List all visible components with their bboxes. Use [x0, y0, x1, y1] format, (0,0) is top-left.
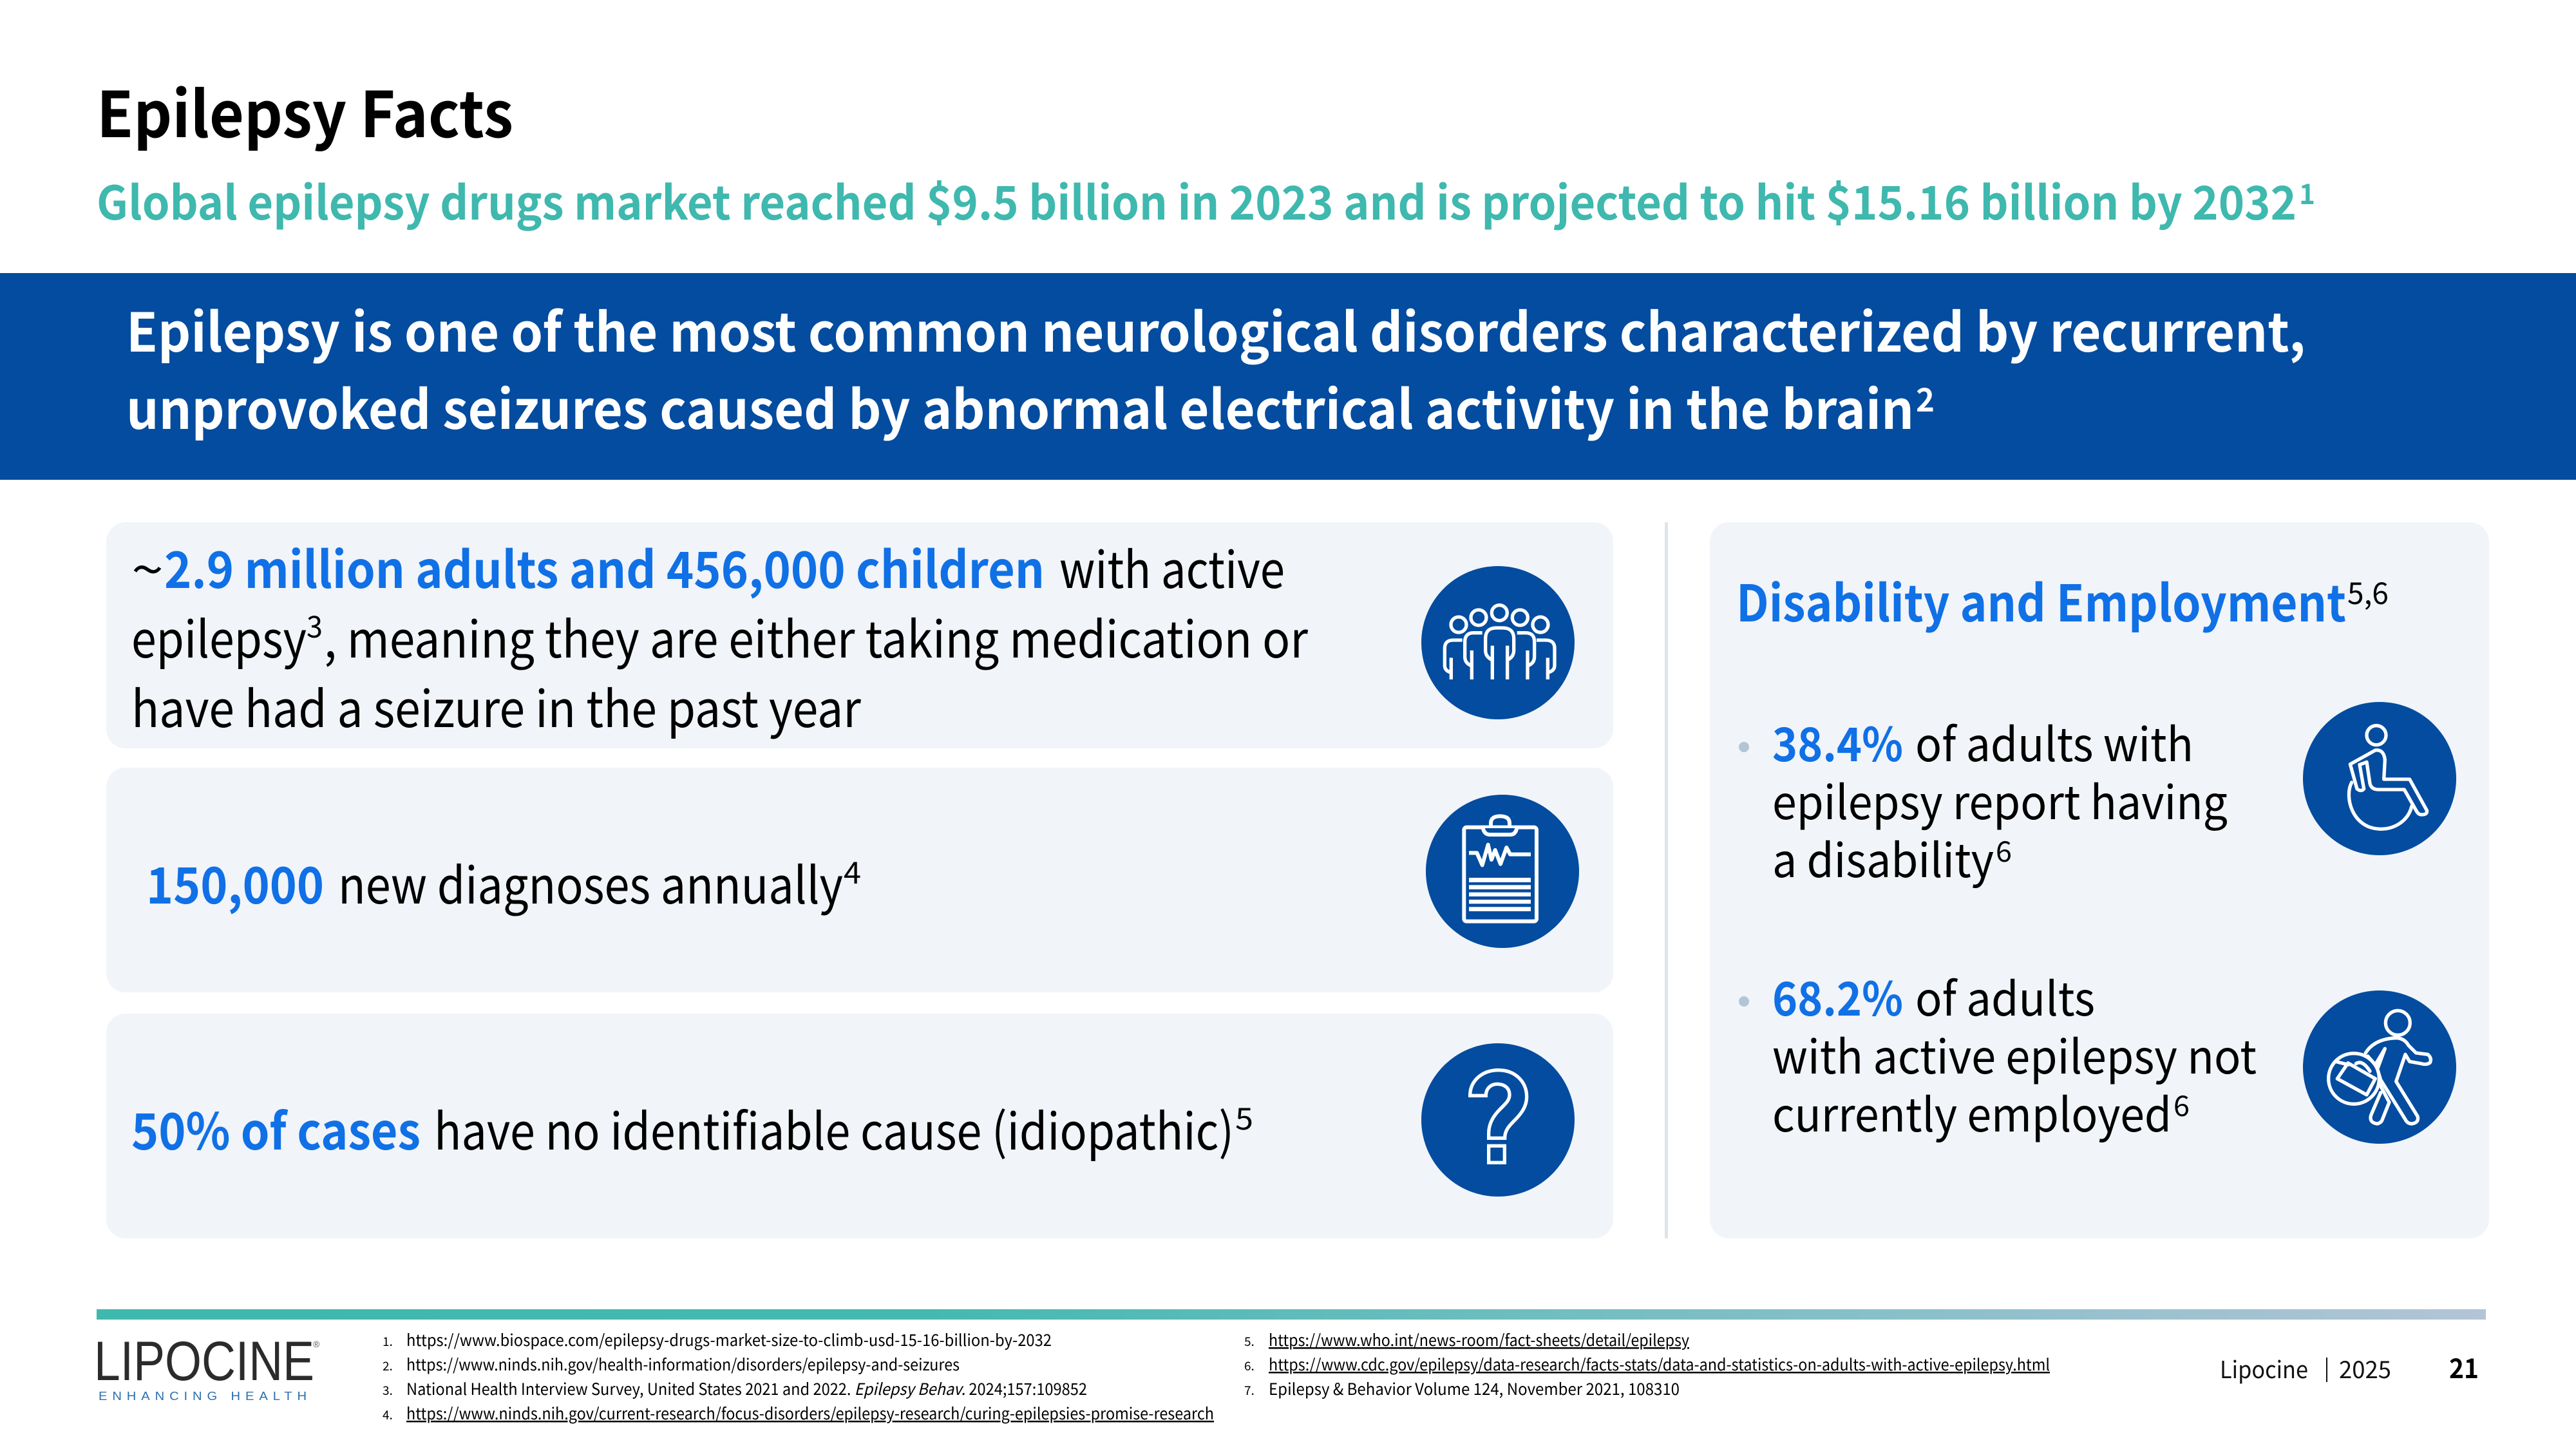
footer label: Lipocine 2025: 2025	[2339, 1350, 2391, 1385]
icon: question mark	[1421, 1043, 1575, 1197]
heading: disability and employment: Disability and Employment	[1736, 564, 2346, 636]
subtitle: market size: Global epilepsy drugs market reached $9.5 billion in 2023 and is projected to hit $15.16 billion by 2032	[97, 166, 2297, 233]
title: Epilepsy Facts	[97, 64, 513, 156]
bullet: disability statistic: epilepsy report having	[1772, 765, 2228, 833]
bullet: employment statistic: 6	[2174, 1083, 2190, 1124]
text block: prevalence: epilepsy	[131, 600, 307, 672]
footnotes: references 1 to 4: https://www.ninds.nih.gov/health-information/disorders/epilepsy-and-seizures	[406, 1352, 960, 1376]
text block: prevalence: ~	[131, 531, 164, 603]
footnotes: references 5 to 7: Epilepsy & Behavior Volume 124, November 2021, 108310	[1269, 1377, 1680, 1400]
banner: definition of epilepsy: 2	[1916, 375, 1935, 421]
footnotes: references 1 to 4: 1.	[383, 1332, 393, 1350]
icon: group of people	[1421, 566, 1575, 719]
icon: clipboard with ECG trace	[1426, 795, 1579, 948]
icon: person in wheelchair	[2303, 702, 2456, 855]
footnotes: references 1 to 4: https://www.ninds.nih.gov/current-research/focus-disorders/epilepsy-research/curing-epilepsies-promise-research	[406, 1401, 1214, 1425]
text block: new diagnoses	[146, 846, 861, 918]
footnotes: references 5 to 7: https://www.who.int/news-room/fact-sheets/detail/epilepsy	[1269, 1328, 1689, 1351]
page number: 21	[2449, 1347, 2479, 1387]
subtitle: market size: 1	[2299, 171, 2315, 213]
footnotes: references 1 to 4: National Health Interview Survey, United States 2021 and 2022. Epilepsy Behav. 2024;157:109852	[406, 1377, 1087, 1400]
bullet: employment statistic: with active epilepsy not	[1772, 1019, 2257, 1087]
logo: Lipocine: ENHANCING HEALTH	[99, 1390, 312, 1403]
footer label: Lipocine 2025: Lipocine	[2220, 1350, 2308, 1385]
panel: disability and employment	[1710, 522, 2489, 1238]
bullet: disability statistic: 38.4%	[1772, 707, 1903, 775]
bullet: employment statistic: of adults	[1915, 961, 2095, 1029]
text block: prevalence	[131, 531, 1309, 742]
text block: idiopathic cases: 50% of cases	[131, 1092, 421, 1164]
icon: person walking away with briefcase	[2303, 990, 2456, 1144]
text block: prevalence: with active	[1059, 531, 1285, 603]
bullet: disability statistic	[1739, 707, 2228, 891]
heading: disability and employment: 5,6	[2347, 569, 2389, 613]
text block: prevalence: have had a seizure in the past year	[131, 670, 862, 742]
text block: new diagnoses: 4	[844, 848, 861, 893]
footnotes: references 1 to 4: https://www.biospace.com/epilepsy-drugs-market-size-to-climb-usd-15-16-billion-by-2032	[406, 1328, 1052, 1351]
bullet: disability statistic: of adults with	[1915, 707, 2193, 775]
text block: idiopathic cases: 5	[1235, 1094, 1253, 1139]
banner: definition of epilepsy	[0, 273, 2576, 480]
panel: active epilepsy prevalence	[106, 522, 1613, 748]
bullet: employment statistic: currently employed	[1772, 1077, 2172, 1145]
footnotes: references 1 to 4: 3.	[383, 1381, 393, 1399]
text block: new diagnoses: new diagnoses annually	[338, 846, 843, 918]
banner: definition of epilepsy: unprovoked seizures caused by abnormal electrical activity in the brain	[126, 367, 1914, 444]
footnotes: references 5 to 7: 5.	[1244, 1332, 1255, 1350]
footnotes: references 5 to 7: https://www.cdc.gov/epilepsy/data-research/facts-stats/data-and-statistics-on-adults-with-active-epilepsy.html	[1269, 1352, 2050, 1376]
text block: idiopathic cases: have no identifiable cause (idiopathic)	[434, 1092, 1234, 1164]
footnotes: references 5 to 7: 7.	[1244, 1381, 1255, 1399]
footnotes: references 1 to 4: 4.	[383, 1406, 393, 1423]
banner: definition of epilepsy: Epilepsy is one of the most common neurological disorders characterized by recurrent,	[126, 290, 2306, 367]
text block: prevalence: 3	[307, 602, 323, 647]
text block: prevalence: 2.9 million adults and 456,000 children	[164, 531, 1045, 603]
footnotes: references 1 to 4: 2.	[383, 1357, 393, 1374]
text block: new diagnoses: 150,000	[146, 846, 324, 918]
logo: Lipocine: ®	[313, 1339, 320, 1349]
bullet: disability statistic: 6	[1996, 829, 2012, 870]
divider	[1665, 522, 1668, 1238]
panel: new diagnoses	[106, 768, 1613, 992]
footnotes: references 5 to 7: 6.	[1244, 1357, 1255, 1374]
panel: idiopathic cases	[106, 1014, 1613, 1238]
footer label: Lipocine 2025	[2220, 1350, 2391, 1385]
bullet: employment statistic: 68.2%	[1772, 961, 1903, 1029]
footnotes: references 5 to 7	[1244, 1328, 2050, 1400]
footer gradient bar	[97, 1309, 2486, 1320]
footnotes: references 1 to 4	[383, 1328, 1214, 1425]
bullet: disability statistic: a disability	[1772, 823, 1994, 891]
text block: prevalence: , meaning they are either taking medication or	[324, 600, 1309, 672]
bullet: employment statistic	[1739, 961, 2257, 1145]
logo: Lipocine: LIPOCINE	[94, 1331, 314, 1392]
text block: idiopathic cases	[131, 1092, 1253, 1164]
